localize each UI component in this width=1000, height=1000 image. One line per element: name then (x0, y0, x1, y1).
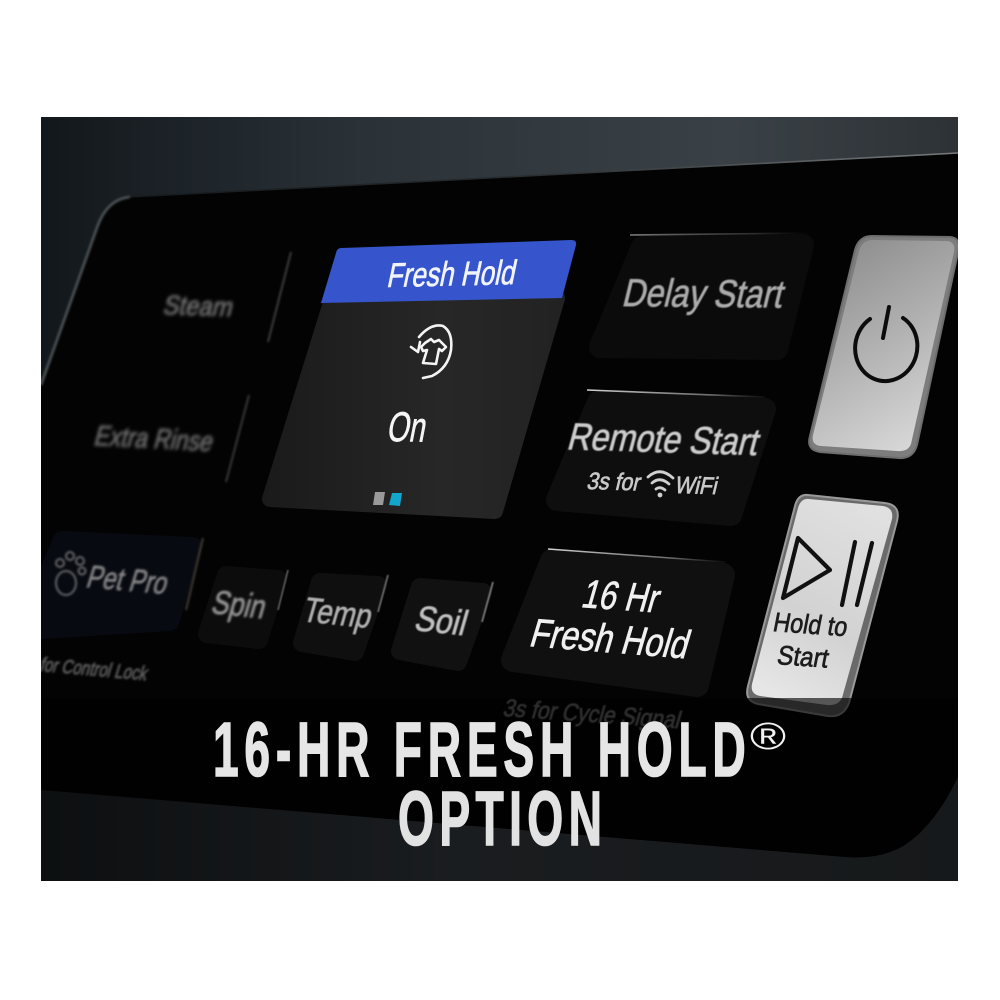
display screen (270, 240, 576, 511)
image frame (38, 117, 959, 881)
display heading: Fresh Hold (384, 254, 520, 295)
button: play pause: Hold to (771, 606, 851, 642)
button: Temp: Temp (299, 591, 377, 636)
button: Remote Start (557, 390, 765, 515)
icon: play pause (783, 538, 872, 605)
display body (270, 298, 557, 511)
button: Remote Start: Remote Start (564, 416, 765, 464)
button: Spin: Spin (208, 584, 271, 626)
title: 16-HR FRESH HOLD (213, 708, 746, 793)
button: Delay Start: Delay Start (619, 272, 789, 316)
button: play pause: Start (775, 639, 832, 673)
icon: power (855, 307, 917, 381)
title (215, 721, 786, 778)
display header blue band (321, 240, 576, 303)
registered mark: ® (750, 716, 786, 758)
button: Temp (299, 575, 388, 652)
button: Remote Start: 3s for (585, 468, 644, 496)
display status: On (384, 403, 431, 451)
button: 16 Hr Fresh Hold: Fresh Hold (525, 610, 696, 667)
control panel black fascia (41, 153, 958, 858)
infographic (41, 117, 958, 881)
button: Pet Pro: Pet Pro (83, 559, 173, 601)
icon: wifi (648, 472, 673, 496)
button: Remote Start: WiFi (673, 472, 721, 500)
button: Steam: Steam (161, 289, 237, 322)
button: Soil: Soil (411, 598, 473, 643)
button: 16 Hr Fresh Hold (513, 549, 725, 685)
button: 16 Hr Fresh Hold: 16 Hr (577, 571, 666, 621)
fascia edge highlight (41, 153, 958, 385)
button: Soil (400, 582, 493, 662)
icon: paw (56, 552, 86, 595)
button: Pet Pro (41, 538, 203, 630)
page dots (373, 492, 402, 506)
caption: for Control Lock: for Control Lock (38, 655, 151, 685)
button: Extra Rinse: Extra Rinse (91, 420, 218, 457)
button: play pause (747, 495, 898, 716)
button: Delay Start (622, 232, 794, 316)
button: power (809, 236, 959, 458)
title second line: OPTION (398, 777, 602, 862)
caption: 3s for Cycle Signal: 3s for Cycle Signal (500, 696, 684, 734)
dark caption overlay (41, 698, 958, 881)
button: Steam (161, 252, 291, 342)
background photo panel (41, 117, 958, 881)
icon: shirt refresh (411, 325, 451, 378)
button: Spin (207, 570, 288, 640)
button: Extra Rinse (91, 395, 249, 482)
